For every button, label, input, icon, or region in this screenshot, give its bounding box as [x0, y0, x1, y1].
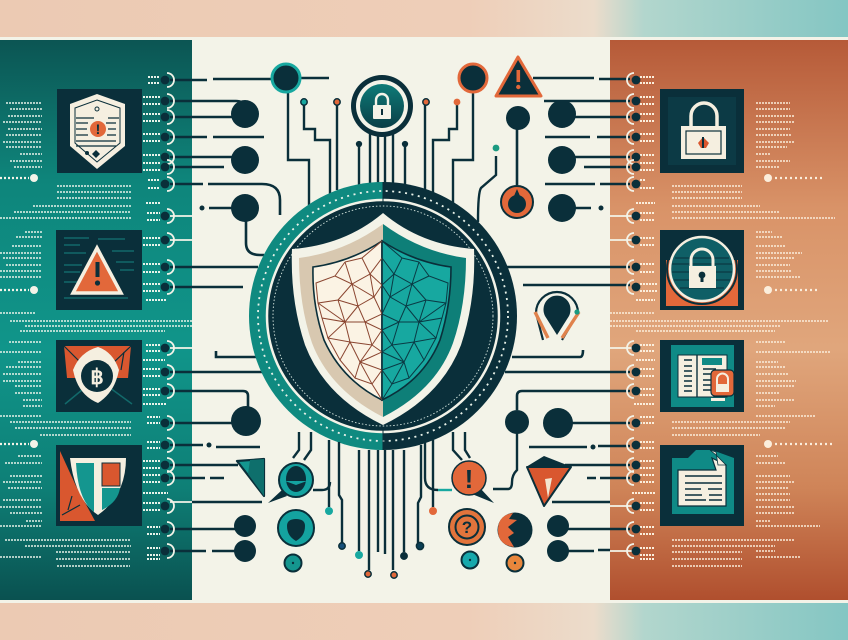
emblem: dotted ring	[258, 191, 508, 441]
icon: teal kite	[237, 459, 264, 496]
icon: top warning triangle	[496, 57, 541, 96]
bullet dots	[764, 174, 772, 448]
text block: connector labels	[632, 77, 658, 559]
icon box: shield document	[57, 89, 142, 173]
icon: orange gem triangle	[526, 456, 572, 506]
bottom dotted strip	[0, 603, 848, 640]
text block: connector labels	[143, 77, 168, 559]
text block: left panel placeholder lines	[0, 103, 192, 566]
shield: left beige	[299, 224, 383, 417]
shield: inner mesh left	[313, 241, 382, 400]
emblem: outer ring	[249, 182, 517, 450]
icon box: shield document: !	[96, 121, 100, 137]
bottom terminal dots	[325, 507, 437, 578]
central emblem	[249, 182, 517, 450]
icon box: split shield	[56, 445, 142, 526]
connector lines left	[170, 78, 329, 551]
icon: small orange node	[506, 554, 524, 572]
icon: orange alert bubble	[452, 461, 494, 503]
connector lines right	[505, 78, 630, 551]
dotted bullet rows	[0, 178, 29, 444]
icon: small teal node	[284, 554, 302, 572]
icon: orange question mark	[449, 509, 485, 545]
connector nodes left	[161, 73, 174, 558]
icon: teal face circle	[278, 510, 314, 546]
icon box: padlock	[660, 89, 744, 173]
icon: orange question mark: ?	[462, 518, 472, 537]
icon box: book with lock	[660, 340, 744, 412]
mesh lines left	[316, 241, 382, 400]
panel: left teal	[0, 40, 192, 600]
dark circles right	[505, 100, 604, 562]
white connector lines left	[170, 216, 192, 502]
icon: orange node ring	[459, 64, 487, 92]
shield: inner mesh right	[382, 241, 451, 400]
shield: cream outline	[292, 213, 474, 425]
icon: top padlock badge	[351, 75, 413, 137]
top dotted strip	[0, 0, 848, 37]
emblem: inner disc	[267, 200, 499, 432]
dark circles left	[200, 100, 261, 562]
top circuit traces	[288, 93, 496, 222]
teal trace stub	[438, 489, 452, 491]
icon: orange alert bubble: !	[465, 464, 473, 494]
icon box: padlock in circle	[660, 230, 744, 310]
icon: orange and dark split circle	[498, 512, 532, 548]
icon: horseshoe pin	[535, 292, 580, 340]
dotted bullet rows	[775, 178, 832, 444]
bottom circuit traces	[293, 432, 517, 570]
top terminal dots	[301, 99, 499, 151]
icon box: bitcoin eye: ฿	[90, 366, 104, 389]
icon box: bitcoin eye	[56, 340, 142, 412]
white connector lines right	[610, 216, 632, 551]
panel: right orange	[610, 40, 848, 600]
connector nodes right	[627, 73, 640, 558]
icon: teal node ring	[272, 64, 300, 92]
icon: orange bulb node	[501, 186, 533, 218]
icon box: warning triangle	[56, 230, 142, 310]
icon box: document folder	[660, 445, 744, 526]
icon: teal speech head	[268, 463, 313, 503]
shield: right teal	[383, 224, 466, 417]
bullet dots	[30, 174, 38, 448]
text block: right panel placeholder lines	[610, 103, 835, 566]
icon: small teal node right	[462, 552, 478, 568]
mesh lines right	[382, 241, 448, 400]
